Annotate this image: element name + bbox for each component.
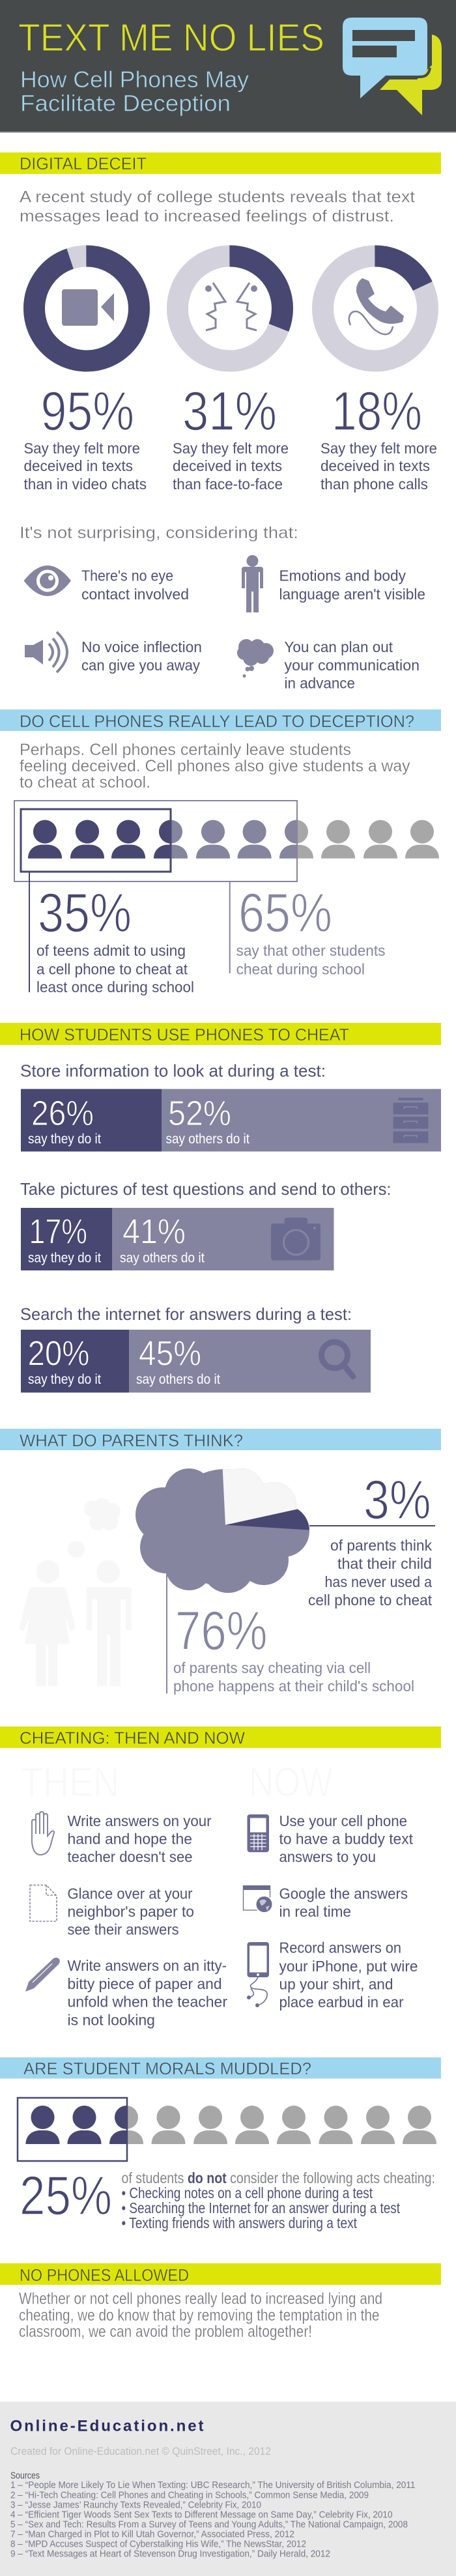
icon: speech bubbles xyxy=(343,18,442,115)
intro text: messages lead to increased feelings of distrust. xyxy=(20,207,394,225)
stat: 95%: deceived in texts xyxy=(23,457,133,474)
stat: 95%: Say they felt more xyxy=(23,440,140,457)
item: google answers: Google the answers xyxy=(279,1885,408,1902)
intro text xyxy=(20,741,410,792)
bar: search the internet: 45% xyxy=(139,1334,201,1373)
item: glance at paper: neighbor's paper to xyxy=(68,1903,194,1920)
icon: video camera xyxy=(62,289,114,326)
item: use cell phone: Use your cell phone xyxy=(279,1812,407,1829)
stat: 3%: that their child xyxy=(337,1555,432,1572)
item: itty-bitty paper: is not looking xyxy=(68,2012,155,2029)
item: plan communication: in advance xyxy=(284,675,355,692)
illustration: two faint children xyxy=(19,1498,132,1686)
item: write on hand: teacher doesn't see xyxy=(68,1848,193,1865)
panel: how students use phones to cheat xyxy=(0,1023,441,1393)
bar: store information: 26% xyxy=(31,1094,94,1133)
donut: 18% phone calls xyxy=(323,256,427,361)
stat: 31% xyxy=(173,380,289,493)
bar: take pictures xyxy=(21,1208,334,1270)
item: voice inflection: can give you away xyxy=(81,657,200,674)
conclusion text xyxy=(19,2289,382,2341)
item: glance at paper: see their answers xyxy=(68,1921,178,1938)
sources: 8 – “MPD Accuses Suspect of Cyberstalking His Wife,” The NewsStar, 2012 xyxy=(10,2540,306,2550)
stat: 95% xyxy=(23,380,147,493)
panel: digital deceit xyxy=(0,152,441,692)
title: TEXT ME NO LIES xyxy=(18,16,324,59)
stat: 3%: has never used a xyxy=(324,1573,433,1590)
text: considering that: It's not surprising, considering that: xyxy=(20,524,298,542)
chart: cloud pie xyxy=(135,1468,309,1593)
heading: HOW STUDENTS USE PHONES TO CHEAT xyxy=(20,1025,349,1044)
item: plan communication: You can plan out xyxy=(284,638,393,655)
sources xyxy=(10,2470,416,2559)
icon: camera xyxy=(271,1218,321,1260)
bar: store information xyxy=(21,1089,441,1152)
label: now: NOW xyxy=(249,1760,333,1805)
stat: 3%: 3% xyxy=(363,1469,431,1530)
intro text: to cheat at school. xyxy=(20,773,150,792)
list: acts not considered cheating xyxy=(121,2169,435,2231)
subtitle xyxy=(20,67,249,116)
item: itty-bitty paper: unfold when the teacher xyxy=(68,1994,227,2011)
item: google answers: in real time xyxy=(279,1903,351,1920)
bar: take pictures: say they do it xyxy=(28,1251,101,1265)
item: record on iphone: Record answers on xyxy=(279,1939,401,1956)
stat: 65%: say that other students xyxy=(236,942,386,959)
conclusion text: cheating, we do know that by removing the temptation in the xyxy=(19,2306,379,2325)
icon: iphone and earbuds xyxy=(247,1942,269,2007)
item: body language: Emotions and body xyxy=(279,567,406,584)
list: acts not considered cheating: • Texting friends with answers during a text xyxy=(121,2214,357,2231)
sources: 5 – “Sex and Tech: Results From a Survey of Teens and Young Adults,” The National Campaign, 2008 xyxy=(10,2520,408,2530)
bar: take pictures: say others do it xyxy=(120,1251,205,1265)
panel: no phones allowed xyxy=(0,2263,441,2341)
subtitle: Facilitate Deception xyxy=(20,91,231,116)
item: record on iphone xyxy=(247,1939,418,2011)
item: google answers xyxy=(244,1885,408,1920)
item: write on hand xyxy=(32,1812,212,1865)
icon: filing cabinet xyxy=(393,1098,429,1143)
heading: NO PHONES ALLOWED xyxy=(20,2265,189,2285)
heading xyxy=(0,1023,441,1045)
stat: 18%: 18% xyxy=(332,380,422,442)
conclusion text: Whether or not cell phones really lead to increased lying and xyxy=(19,2289,382,2308)
panel: do cell phones lead to deception xyxy=(0,709,441,995)
bar: search the internet: 20% xyxy=(27,1334,90,1373)
text: take pictures: Take pictures of test questions and send to others: xyxy=(20,1179,391,1199)
sources: 3 – “Jesse James’ Raunchy Texts Revealed,” Celebrity Fix, 2010 xyxy=(10,2500,261,2511)
stat: 25%: 25% xyxy=(20,2165,112,2226)
logo text: Online-Education.net xyxy=(10,2417,203,2435)
icon: thought cloud xyxy=(237,639,274,678)
heading xyxy=(0,2263,441,2285)
sources: 9 – “Text Messages at Heart of Stevenson Drug Investigation,” Daily Herald, 2012 xyxy=(10,2549,330,2559)
stat: 65%: cheat during school xyxy=(236,960,365,977)
pictogram: ten students xyxy=(14,801,439,992)
stat: 35% xyxy=(36,882,194,995)
intro text: feeling deceived. Cell phones also give students a way xyxy=(20,757,410,775)
stat: 95%: than in video chats xyxy=(23,476,147,493)
stat: 31%: deceived in texts xyxy=(173,457,282,474)
heading: WHAT DO PARENTS THINK? xyxy=(20,1431,243,1450)
heading xyxy=(0,152,441,174)
stat: 18%: than phone calls xyxy=(321,476,428,493)
icon: speaker xyxy=(25,632,67,672)
icon: hand xyxy=(32,1812,54,1855)
stat: 31%: than face-to-face xyxy=(173,476,283,493)
intro text xyxy=(20,188,415,225)
item: voice inflection: No voice inflection xyxy=(81,638,202,655)
item: use cell phone xyxy=(248,1812,413,1865)
stat: 18% xyxy=(321,380,437,493)
stat: 65%: 65% xyxy=(238,882,332,943)
donut: 95% video chats xyxy=(34,256,139,361)
intro text: A recent study of college students reveals that text xyxy=(20,188,415,206)
item: glance at paper xyxy=(30,1885,194,1938)
item: body language xyxy=(242,555,425,612)
icon: eye xyxy=(24,565,71,596)
stat: 18%: deceived in texts xyxy=(321,457,430,474)
stat: 76% xyxy=(167,1566,414,1695)
stat: 3% xyxy=(308,1469,435,1609)
item: record on iphone: place earbud in ear xyxy=(279,1994,404,2011)
sources: 1 – “People More Likely To Lie When Texting: UBC Research,” The University of British Columbia, 2011 xyxy=(10,2480,416,2491)
credit: Created for Online-Education.net © QuinStreet, Inc., 2012 xyxy=(10,2446,271,2457)
heading: DIGITAL DECEIT xyxy=(20,154,147,173)
icon: dashed paper xyxy=(30,1885,57,1921)
text: store information: Store information to look at during a test: xyxy=(20,1061,326,1080)
item: no eye contact xyxy=(24,565,189,603)
sources: Sources xyxy=(10,2470,40,2481)
item: plan communication: your communication xyxy=(284,657,420,674)
item: body language: language aren't visible xyxy=(279,586,425,603)
stat: 31%: Say they felt more xyxy=(173,440,289,457)
heading: DO CELL PHONES REALLY LEAD TO DECEPTION? xyxy=(20,711,414,731)
stat: 95%: 95% xyxy=(40,380,134,442)
stat: 31%: 31% xyxy=(182,380,277,442)
item: write on hand: Write answers on your xyxy=(68,1812,212,1829)
intro text: Perhaps. Cell phones certainly leave students xyxy=(20,741,351,759)
stat: 35%: of teens admit to using xyxy=(36,942,186,959)
heading: CHEATING: THEN AND NOW xyxy=(20,1728,245,1747)
item: voice inflection xyxy=(25,632,202,674)
sources: 4 – “Efficient Tiger Woods Sent Sex Texts to Different Message on Same Day,” Celebrity Fix, 2010 xyxy=(10,2510,392,2520)
label: then: THEN xyxy=(21,1760,119,1805)
bar: take pictures: 17% xyxy=(29,1212,87,1251)
item: plan communication xyxy=(237,638,420,692)
stat: 3%: of parents think xyxy=(330,1537,432,1554)
panel: header xyxy=(0,0,456,133)
heading xyxy=(0,1726,441,1748)
panel: what do parents think xyxy=(0,1429,441,1695)
icon: cell phone xyxy=(248,1814,269,1852)
icon: pencil xyxy=(25,1958,60,1992)
icon: telephone xyxy=(349,278,404,334)
heading xyxy=(0,2057,441,2078)
stat: 65% xyxy=(236,882,386,977)
pictogram: ten students xyxy=(18,2098,436,2161)
bar: search the internet: say others do it xyxy=(136,1372,220,1387)
stat: 35%: a cell phone to cheat at xyxy=(36,960,188,977)
item: glance at paper: Glance over at your xyxy=(68,1885,193,1902)
stat: 76%: phone happens at their child's school xyxy=(173,1678,414,1695)
heading: ARE STUDENT MORALS MUDDLED? xyxy=(23,2059,311,2078)
item: record on iphone: your iPhone, put wire xyxy=(279,1958,418,1975)
conclusion text: classroom, we can avoid the problem altogether! xyxy=(19,2323,312,2341)
icon: two faces xyxy=(205,283,257,330)
item: no eye contact: There's no eye xyxy=(81,567,173,584)
heading xyxy=(0,1429,441,1450)
panel: are student morals muddled xyxy=(0,2057,441,2231)
item: itty-bitty paper: Write answers on an itty- xyxy=(68,1957,227,1974)
bar: store information: say they do it xyxy=(28,1132,101,1147)
item: itty-bitty paper xyxy=(25,1957,227,2029)
stat: 76%: 76% xyxy=(175,1600,267,1661)
icon: browser and globe xyxy=(244,1885,274,1913)
item: itty-bitty paper: bitty piece of paper and xyxy=(68,1975,221,1992)
stat: 35%: least once during school xyxy=(36,979,194,995)
bar: store information: 52% xyxy=(168,1094,231,1133)
bar: store information: say others do it xyxy=(165,1132,249,1147)
stat: 76%: of parents say cheating via cell xyxy=(173,1659,371,1676)
text: search the internet: Search the internet for answers during a test: xyxy=(20,1304,352,1324)
panel: footer xyxy=(0,2401,456,2576)
stat: 18%: Say they felt more xyxy=(321,440,437,457)
item: write on hand: hand and hope the xyxy=(68,1831,192,1848)
stat: 35%: 35% xyxy=(38,882,132,943)
stat: 3%: cell phone to cheat xyxy=(308,1592,432,1609)
item: use cell phone: to have a buddy text xyxy=(279,1831,413,1848)
item: use cell phone: answers to you xyxy=(279,1848,376,1865)
panel: cheating then and now xyxy=(0,1726,441,2029)
icon: person xyxy=(242,555,263,612)
sources: 2 – “Hi-Tech Cheating: Cell Phones and Cheating in Schools,” Common Sense Media, 2009 xyxy=(10,2490,369,2500)
list: acts not considered cheating: • Checking notes on a cell phone during a test xyxy=(121,2184,373,2201)
subtitle: How Cell Phones May xyxy=(20,67,249,93)
icon: magnifying glass xyxy=(322,1342,353,1377)
item: no eye contact: contact involved xyxy=(81,586,189,603)
bar: search the internet: say they do it xyxy=(28,1372,101,1387)
bar: take pictures: 41% xyxy=(122,1212,186,1251)
sources: 7 – “Man Charged in Plot to Kill Utah Governor,” Associated Press, 2012 xyxy=(10,2529,294,2540)
donut: 31% face-to-face xyxy=(177,256,283,361)
bar: search the internet xyxy=(21,1330,371,1393)
item: record on iphone: up your shirt, and xyxy=(279,1975,393,1992)
